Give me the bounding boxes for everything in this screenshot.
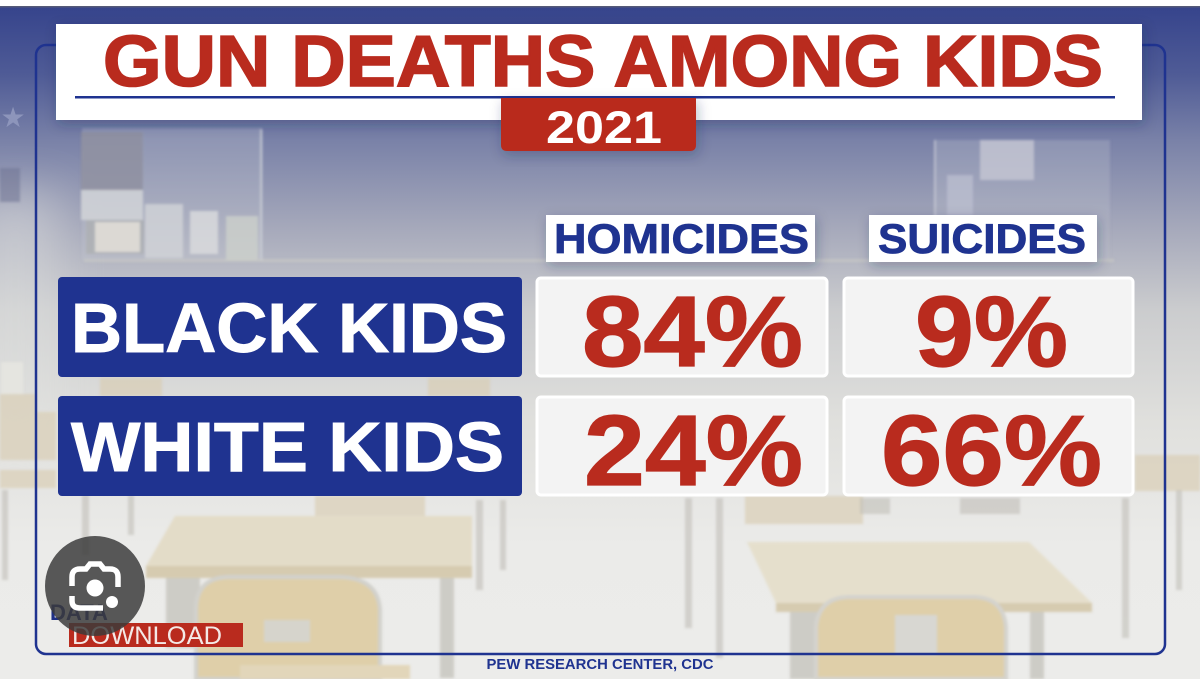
star: ★ (0, 101, 26, 134)
classroom posters (81, 132, 1034, 260)
value: black kids suicides (844, 276, 1133, 388)
left wall details (0, 168, 20, 202)
title: GUN DEATHS AMONG KIDS (103, 22, 1103, 102)
source credit: PEW RESEARCH CENTER, CDC (486, 657, 714, 673)
value: black kids homicides (537, 276, 827, 388)
value: white kids suicides: 66% (881, 395, 1102, 507)
value: black kids homicides: 84% (582, 276, 803, 388)
value: white kids homicides (537, 395, 827, 507)
year badge (501, 98, 696, 153)
row label: black kids: BLACK KIDS (71, 289, 507, 367)
value: white kids suicides (844, 395, 1133, 507)
column header: suicides: SUICIDES (878, 215, 1086, 262)
title banner (56, 22, 1142, 120)
column header: homicides: HOMICIDES (554, 215, 809, 262)
logo: data download: DATA (50, 600, 108, 625)
value: black kids suicides: 9% (915, 276, 1068, 388)
row label: white kids: WHITE KIDS (71, 408, 504, 486)
logo: data download: DOWNLOAD (72, 622, 222, 650)
front right desk (747, 542, 1092, 679)
front left desk (146, 516, 472, 679)
back row furniture (0, 378, 1200, 524)
chalkboard (82, 128, 1114, 262)
row label: white kids (58, 396, 522, 496)
value: white kids homicides: 24% (584, 395, 803, 507)
desk legs (2, 490, 1182, 658)
icon: camera lens search button (45, 536, 145, 636)
logo: data download (50, 600, 243, 650)
year badge: 2021 (546, 102, 662, 153)
